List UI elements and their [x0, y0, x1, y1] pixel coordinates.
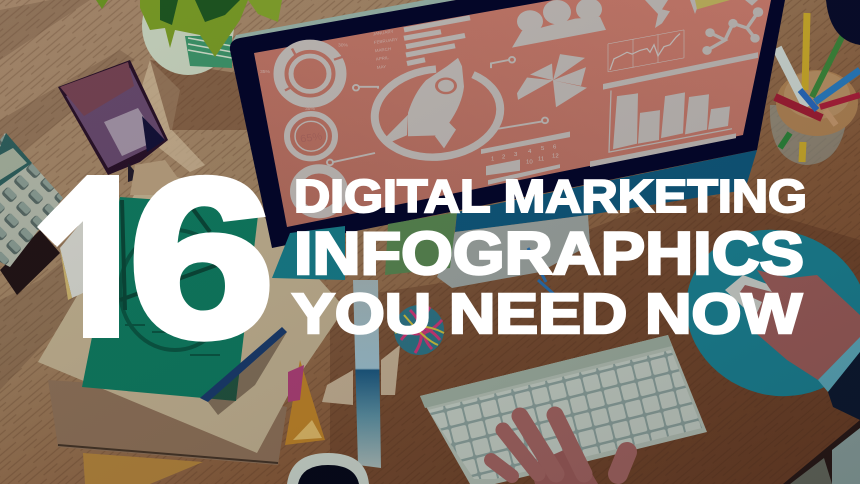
donut chart 65 percent: [287, 114, 335, 159]
month labels: [372, 29, 398, 70]
percent labels: 35%: [305, 106, 316, 112]
month labels: APRIL: [375, 55, 390, 62]
donut chart one: [279, 45, 345, 103]
monitor foot: [437, 215, 590, 288]
line chart: [608, 30, 684, 72]
dark object top right: [826, 0, 860, 45]
timeline calendar: 11: [538, 157, 544, 162]
month labels: MARCH: [374, 46, 391, 53]
table corner and chair: [783, 420, 860, 484]
timeline calendar: 2: [502, 155, 505, 161]
bezel: [230, 0, 785, 248]
divider bar top: [603, 52, 758, 90]
percent labels: [260, 43, 349, 112]
network icon: [704, 9, 762, 53]
timeline calendar: 12: [552, 154, 559, 160]
world map: [645, 0, 758, 28]
timeline calendar: 3: [514, 152, 517, 158]
headline line 2: INFOGRAPHICS: [294, 220, 804, 287]
timeline calendar: 5: [541, 146, 544, 152]
people icon: [512, 0, 606, 48]
percent labels: 30%: [338, 43, 349, 49]
timeline calendar: 1: [491, 157, 494, 162]
horizontal bar list: [404, 18, 470, 63]
leather wallet: [58, 60, 168, 182]
month labels: FEBRUARY: [373, 37, 398, 45]
pie chart: [517, 54, 587, 107]
monitor stand: [455, 150, 757, 232]
month labels: MAY: [376, 64, 387, 70]
plant in pot: [96, 0, 282, 75]
teal card: [272, 226, 345, 280]
keyboard: [420, 335, 707, 484]
timeline calendar: 6: [553, 144, 556, 150]
digit 1: 1: [24, 129, 153, 388]
green sketch paper: [82, 197, 259, 401]
connector lines: [327, 57, 548, 165]
coffee cup: [287, 453, 369, 484]
green sticky note: [385, 212, 457, 275]
right hand on mouse: [740, 270, 860, 420]
month labels: JANUARY: [372, 29, 394, 36]
silver monitor rim: [230, 0, 456, 46]
donut chart 65 percent: 65%: [300, 131, 324, 145]
timeline calendar: 10: [526, 159, 533, 165]
paper clips: [528, 248, 556, 296]
typing hand: [491, 415, 627, 484]
beige notebook: [38, 160, 345, 453]
percent labels: 35%: [260, 69, 271, 75]
headline line 3: YOU NEED NOW: [292, 282, 802, 346]
orange folder: [285, 360, 325, 445]
lower notebooks: [48, 380, 287, 484]
computer monitor: [230, 0, 785, 288]
big number 16: [37, 174, 270, 342]
pens in glass jar: [770, 13, 860, 165]
donut chart three: [295, 169, 343, 214]
divider bar bottom: [590, 133, 736, 167]
computer mouse: [725, 275, 805, 345]
calculator: [0, 133, 63, 295]
timeline calendar: 4: [528, 149, 532, 155]
rocket icon: [375, 58, 500, 157]
digit 6: 6: [128, 132, 275, 385]
mouse pad: [663, 204, 860, 422]
screen graphics: [260, 0, 762, 214]
rubber band ball: [394, 305, 444, 355]
pencil: [200, 327, 287, 415]
headline: [292, 170, 807, 346]
sticky note: [695, 0, 730, 9]
screen: [254, 0, 771, 227]
headline line 1: DIGITAL MARKETING: [294, 170, 807, 222]
steel ruler: [322, 280, 400, 468]
bar chart: [609, 91, 732, 152]
timeline calendar: [481, 132, 570, 185]
